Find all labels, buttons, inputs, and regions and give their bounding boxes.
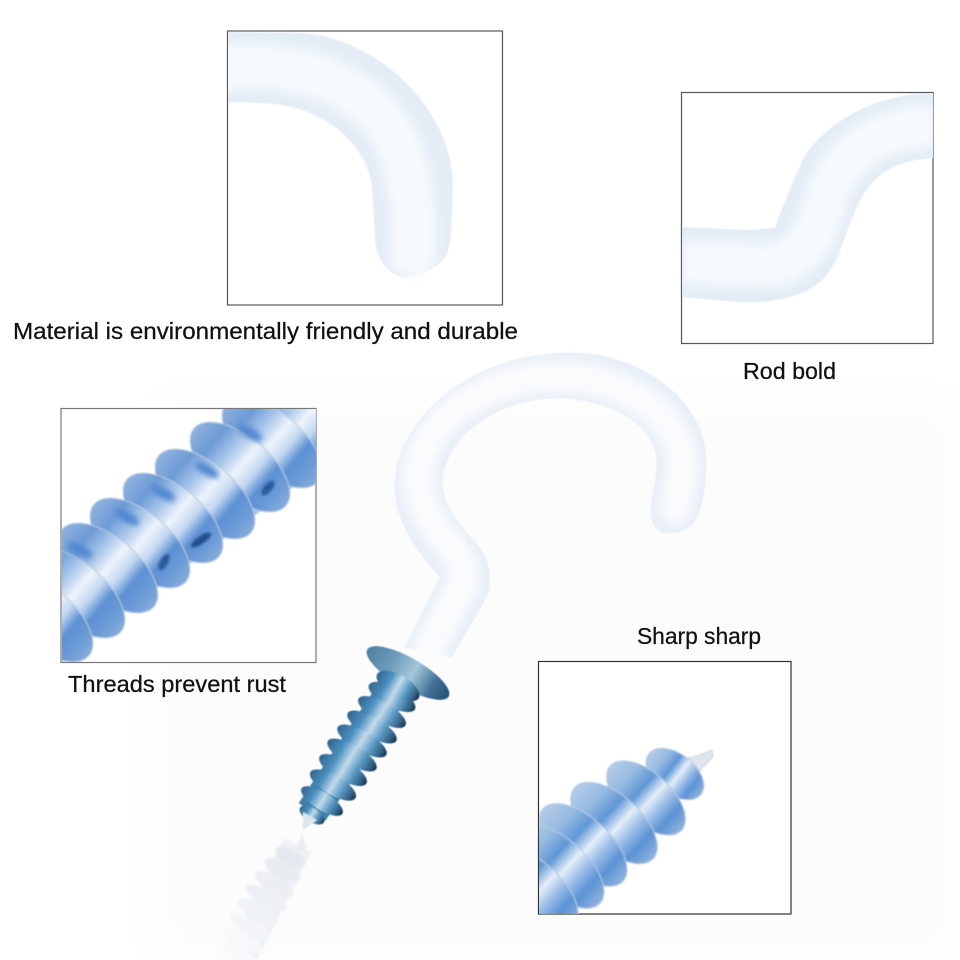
main white hook [395, 353, 706, 657]
reflection of screw [212, 833, 308, 960]
thread detail [62, 409, 316, 662]
rod bend [681, 93, 935, 302]
screw tip detail [539, 747, 714, 914]
caption: threads: Threads prevent rust [68, 671, 286, 697]
caption: rod: Rod bold [743, 358, 836, 384]
hook closeup [226, 32, 453, 277]
panel: material closeup [226, 31, 502, 305]
caption: material: Material is environmentally friendly and durable [13, 318, 518, 344]
main screw with washer [296, 637, 456, 830]
panel: rod closeup [681, 92, 935, 344]
panel: sharp tip closeup [538, 660, 792, 915]
caption: sharp: Sharp sharp [637, 623, 761, 649]
background glow [150, 400, 960, 960]
panel: threads closeup [60, 408, 317, 664]
